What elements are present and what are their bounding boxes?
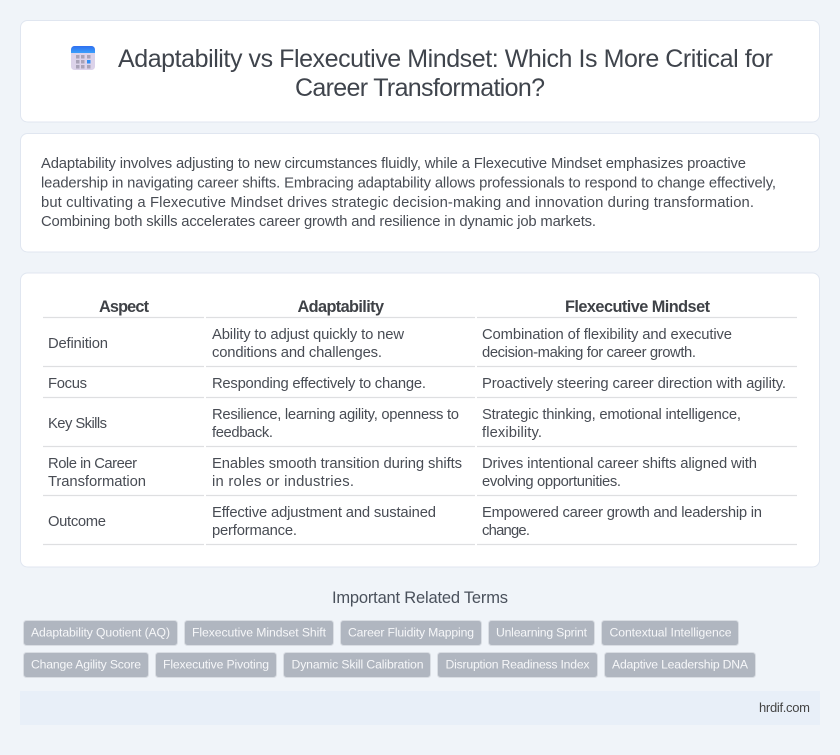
title <box>118 45 773 102</box>
table row: definition <box>48 327 732 361</box>
chip <box>24 652 148 678</box>
table row: key skills: Strategic thinking, emotional intelligence, <box>482 407 741 423</box>
panel: introduction <box>20 134 820 252</box>
table row: role in career transformation: Enables smooth transition during shifts <box>212 456 462 472</box>
table row: role in career transformation: Role in Career <box>48 456 137 472</box>
chip: Dynamic Skill Calibration <box>292 658 424 672</box>
table row: outcome: Empowered career growth and leadership in <box>482 505 762 521</box>
table row: key skills <box>48 407 741 441</box>
chip: Change Agility Score <box>31 658 141 672</box>
table row: key skills: flexibility. <box>482 425 542 441</box>
table row: outcome: Outcome <box>48 514 106 530</box>
table row: key skills: Key Skills <box>48 416 107 432</box>
table row: outcome: change. <box>482 523 530 539</box>
chip <box>184 620 334 646</box>
chip: Career Fluidity Mapping <box>348 626 474 640</box>
chip: Contextual Intelligence <box>610 626 732 640</box>
table row: definition: Definition <box>48 336 108 352</box>
table row: role in career transformation: Drives intentional career shifts aligned with <box>482 456 757 472</box>
table row: focus <box>48 376 786 392</box>
table row: role in career transformation: in roles or industries. <box>212 474 354 490</box>
text block: introduction paragraph: but cultivating a Flexecutive Mindset drives strategic decision-making and innovation during transformation. <box>41 195 754 211</box>
text block: introduction paragraph: Combining both skills accelerates career growth and resilience in dynamic job markets. <box>41 214 596 230</box>
chip <box>156 652 276 678</box>
chip: Adaptive Leadership DNA <box>612 658 749 672</box>
chip <box>488 620 594 646</box>
text block: introduction paragraph: Adaptability involves adjusting to new circumstances fluidly, while a Flexecutive Mindset emphasizes proactive <box>41 156 746 172</box>
footer: hrdif.com <box>759 700 810 715</box>
table row: focus: Focus <box>48 376 87 392</box>
panel: title card <box>20 20 820 122</box>
table header: Flexecutive Mindset <box>565 298 711 316</box>
text block: introduction paragraph: leadership in navigating career shifts. Embracing adaptability allows professionals to respond to change effectively, <box>41 176 776 192</box>
table row: definition: Ability to adjust quickly to new <box>212 327 404 343</box>
icon: calendar <box>71 46 95 70</box>
related term chips <box>24 620 756 678</box>
table row: focus: Responding effectively to change. <box>212 376 426 392</box>
table row: definition: Combination of flexibility and executive <box>482 327 732 343</box>
chip <box>284 652 430 678</box>
table row: key skills: feedback. <box>212 425 273 441</box>
table header: Aspect <box>99 298 150 316</box>
table row: definition: conditions and challenges. <box>212 345 382 361</box>
table row: outcome <box>48 505 762 539</box>
table row: outcome: Effective adjustment and sustained <box>212 505 436 521</box>
table row: focus: Proactively steering career direction with agility. <box>482 376 786 392</box>
chip: Adaptability Quotient (AQ) <box>31 626 170 640</box>
chip <box>438 652 598 678</box>
table row: role in career transformation: evolving opportunities. <box>482 474 621 490</box>
table row: role in career transformation <box>48 456 757 490</box>
table row: key skills: Resilience, learning agility, openness to <box>212 407 459 423</box>
table header: Adaptability <box>298 298 384 316</box>
table row: definition: decision-making for career growth. <box>482 345 696 361</box>
title: Career Transformation? <box>295 74 545 102</box>
heading: important related terms: Important Related Terms <box>332 589 508 607</box>
chip: Disruption Readiness Index <box>446 658 590 672</box>
chip: Unlearning Sprint <box>496 626 588 640</box>
chip: Flexecutive Mindset Shift <box>192 626 327 640</box>
chip <box>602 620 738 646</box>
footer <box>20 691 820 725</box>
chip <box>604 652 756 678</box>
chip <box>24 620 178 646</box>
table row: role in career transformation: Transformation <box>48 474 146 490</box>
table row: outcome: performance. <box>212 523 297 539</box>
text block: introduction paragraph <box>41 156 776 230</box>
chip: Flexecutive Pivoting <box>163 658 269 672</box>
panel: comparison table <box>20 273 820 567</box>
title: Adaptability vs Flexecutive Mindset: Which Is More Critical for <box>118 45 773 73</box>
chip <box>340 620 482 646</box>
table header <box>99 298 711 316</box>
